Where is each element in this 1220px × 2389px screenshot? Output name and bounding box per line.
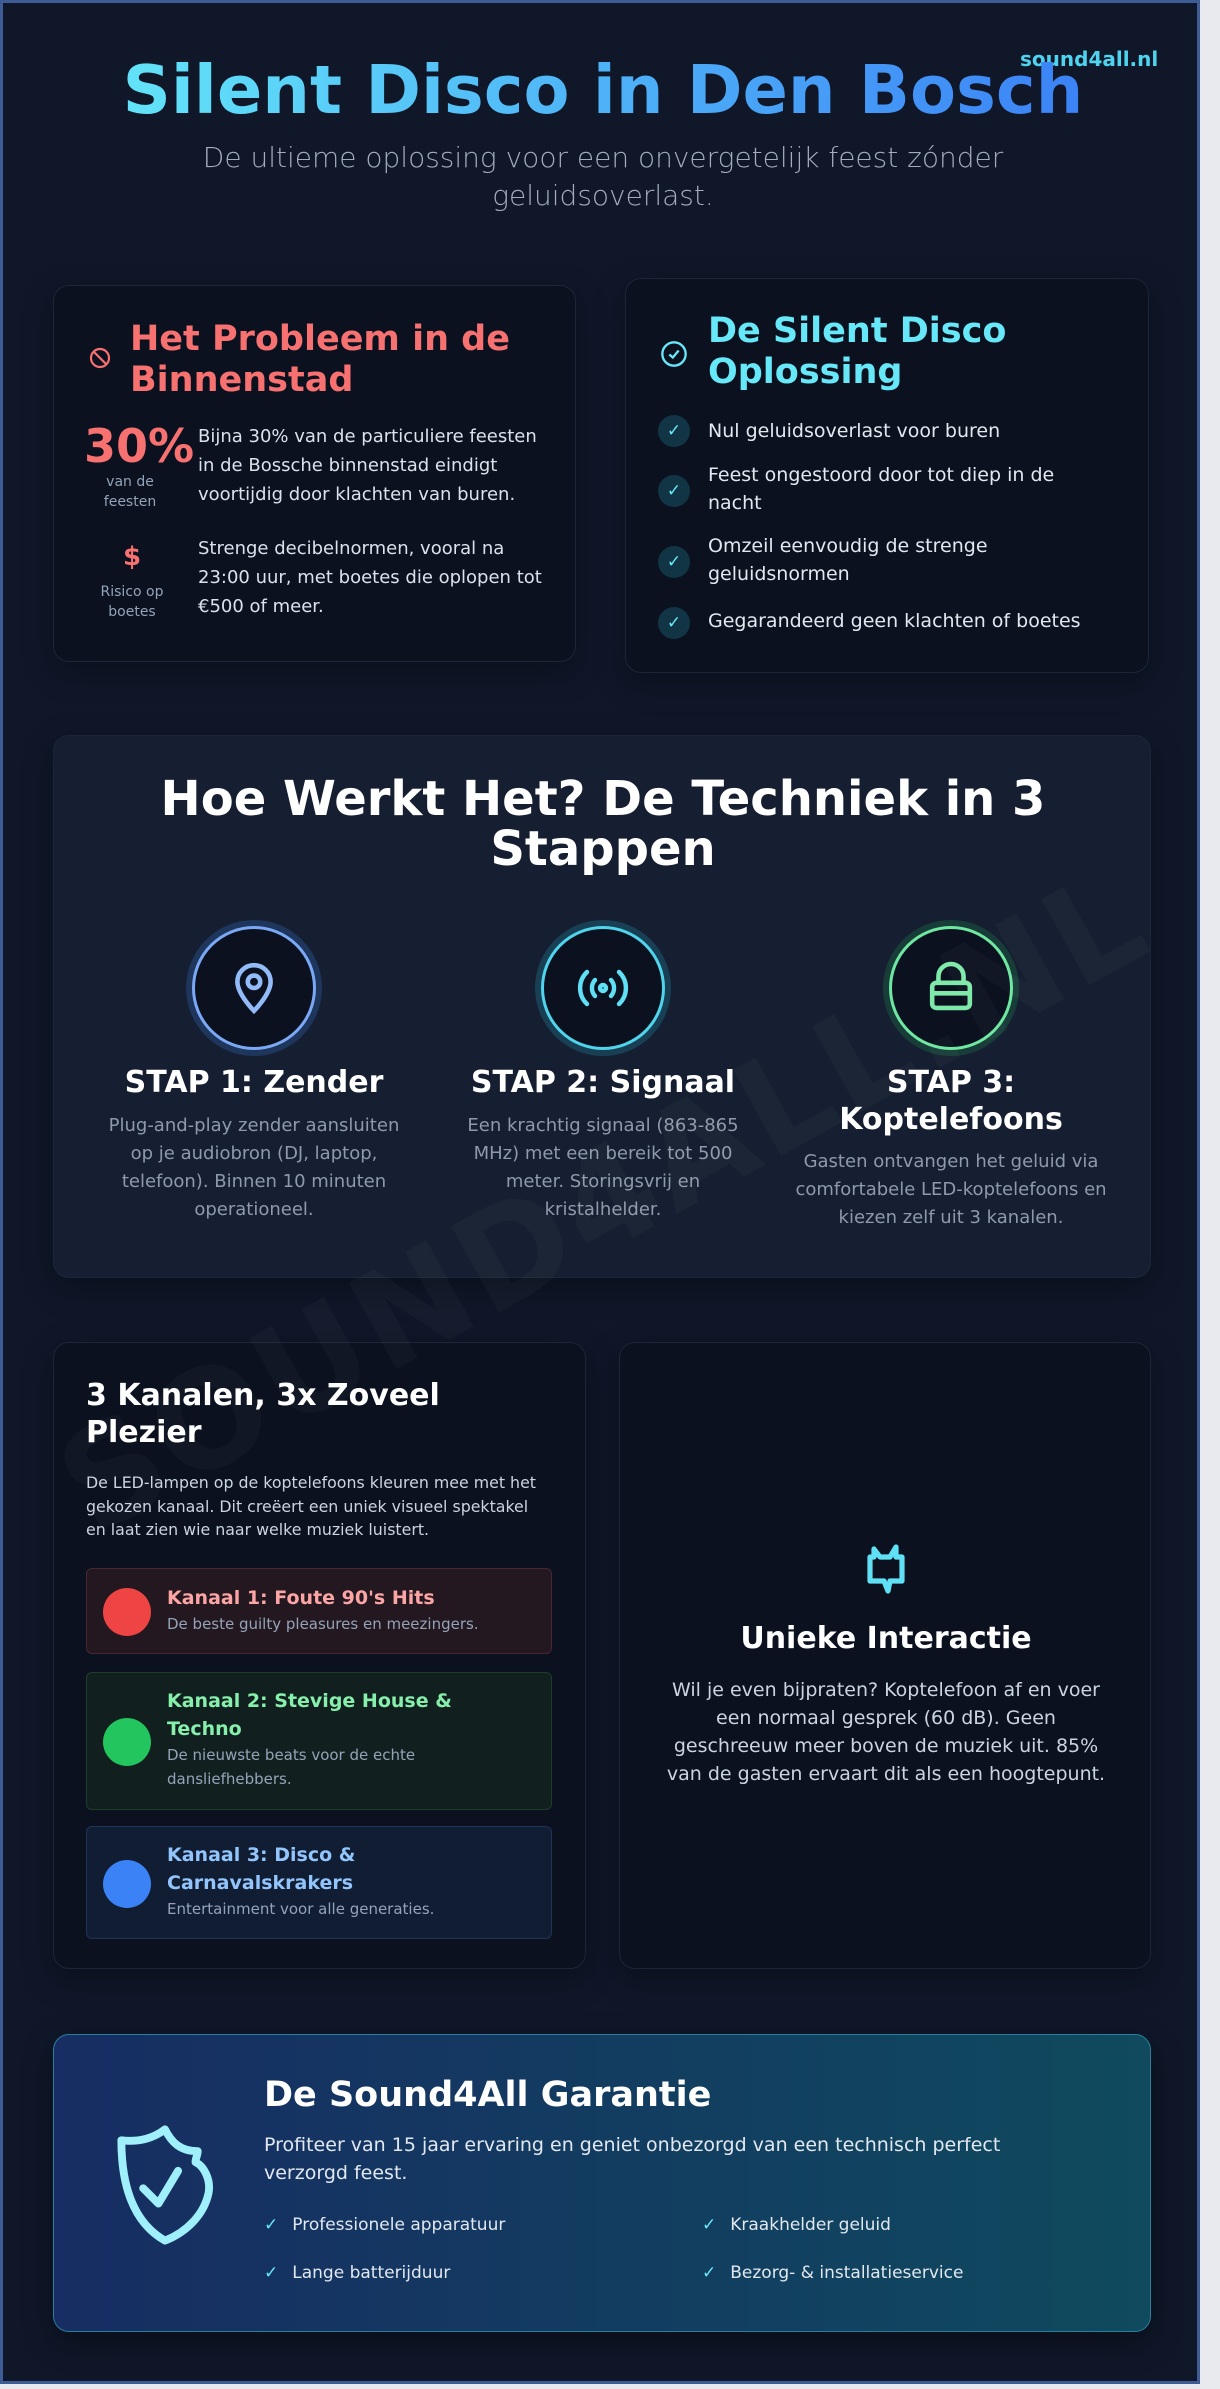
icon: chat (867, 1544, 905, 1594)
heading: interaction: Unieke Interactie (740, 1621, 1032, 1656)
guarantee list: ✓ Lange batterijduur (264, 2263, 450, 2283)
site label: sound4all.nl (1020, 47, 1158, 71)
channel 1: De beste guilty pleasures en meezingers. (167, 1615, 479, 1633)
panel: problem (53, 285, 576, 662)
channel 3 (86, 1826, 552, 1939)
panel: solution (625, 278, 1149, 673)
heading: problem: Het Probleem in de Binnenstad (130, 319, 510, 400)
stat 30%: feesten (104, 494, 156, 510)
step 1 (109, 920, 399, 1220)
step 2 (467, 920, 739, 1220)
solution list: ✓ (667, 552, 681, 572)
step 1: Plug-and-play zender aansluiten op je audiobron (DJ, laptop, telefoon). Binnen 10 minuten operationeel. (109, 1115, 399, 1220)
channel 3: Kanaal 3: Disco & Carnavalskrakers (167, 1844, 355, 1894)
text: interaction: van de gasten ervaart dit als een hoogtepunt. (667, 1763, 1105, 1785)
solution list: ✓ (667, 421, 681, 441)
icon: signal (541, 926, 665, 1050)
icon: dollar: $ (123, 542, 141, 572)
text: interaction: geschreeuw meer boven de muziek uit. 85% (674, 1735, 1098, 1757)
icon: headphones (889, 926, 1013, 1050)
icon: pin (192, 926, 316, 1050)
heading: steps: Hoe Werkt Het? De Techniek in 3 Stappen (161, 771, 1045, 877)
step 3: STAP 3: Koptelefoons (839, 1065, 1063, 1137)
icon: check circle (661, 341, 687, 367)
solution list: Gegarandeerd geen klachten of boetes (708, 610, 1081, 632)
guarantee list: ✓ Kraakhelder geluid (702, 2215, 891, 2235)
guarantee list: ✓ Bezorg- & installatieservice (702, 2263, 963, 2283)
heading: solution: De Silent Disco Oplossing (708, 311, 1006, 392)
solution list: ✓ (667, 613, 681, 633)
icon: shield (117, 2125, 213, 2245)
subtitle: De ultieme oplossing voor een onvergetelijk feest zónder geluidsoverlast. (203, 141, 1003, 212)
panel: interaction (619, 1342, 1151, 1969)
icon: ban (90, 348, 110, 368)
channel 3: Entertainment voor alle generaties. (167, 1900, 434, 1918)
step 3 (795, 920, 1107, 1228)
stat 30% (84, 419, 194, 510)
text: channels intro: De LED-lampen op de koptelefoons kleuren mee met het gekozen kanaal. Dit creëert een uniek visueel spektakel en laat zien wie naar welke muziek luistert. (86, 1473, 536, 1539)
text: problem 2: Strenge decibelnormen, vooral na 23:00 uur, met boetes die oplopen tot €500 of meer. (198, 538, 542, 617)
solution list (658, 415, 1081, 639)
guarantee list (264, 2215, 963, 2283)
text: interaction (667, 1679, 1105, 1785)
icon: dollar: Risico op (101, 584, 163, 600)
step 1: STAP 1: Zender (125, 1065, 383, 1100)
panel: steps (53, 735, 1151, 1278)
channel 1: Kanaal 1: Foute 90's Hits (167, 1587, 435, 1609)
step 2: STAP 2: Signaal (471, 1065, 735, 1100)
solution list: Omzeil eenvoudig de strenge geluidsnormen (708, 535, 988, 585)
solution list: ✓ (667, 481, 681, 501)
solution list: Nul geluidsoverlast voor buren (708, 420, 1000, 442)
icon: dollar: boetes (108, 604, 156, 620)
heading: channels: 3 Kanalen, 3x Zoveel Plezier (86, 1378, 440, 1450)
heading: guarantee: De Sound4All Garantie (264, 2075, 711, 2115)
channel 1 (86, 1568, 552, 1654)
channel 2: De nieuwste beats voor de echte dansliefhebbers. (167, 1746, 415, 1788)
watermark: SOUND4ALL.NL (33, 838, 1173, 1565)
channel 2 (86, 1672, 552, 1810)
text: interaction: Wil je even bijpraten? Koptelefoon af en voer (672, 1679, 1100, 1701)
stat 30%: van de (106, 474, 154, 490)
text: problem 1: Bijna 30% van de particuliere feesten in de Bossche binnenstad eindigt voortijdig door klachten van buren. (198, 426, 537, 505)
panel: guarantee (53, 2034, 1151, 2332)
channel 2: Kanaal 2: Stevige House & Techno (167, 1690, 452, 1740)
panel: channels (53, 1342, 586, 1969)
solution list: Feest ongestoord door tot diep in de nacht (708, 464, 1054, 514)
text: guarantee: Profiteer van 15 jaar ervaring en geniet onbezorgd van een technisch perfect verzorgd feest. (264, 2134, 1000, 2184)
title: Silent Disco in Den Bosch (123, 51, 1083, 129)
step 2: Een krachtig signaal (863-865 MHz) met een bereik tot 500 meter. Storingsvrij en kristalhelder. (467, 1115, 739, 1220)
stat 30%: 30% (84, 419, 194, 473)
icon: dollar (101, 542, 163, 620)
guarantee list: ✓ Professionele apparatuur (264, 2215, 505, 2235)
step 3: Gasten ontvangen het geluid via comfortabele LED-koptelefoons en kiezen zelf uit 3 kanalen. (795, 1151, 1107, 1228)
text: interaction: een normaal gesprek (60 dB). Geen (716, 1707, 1056, 1729)
